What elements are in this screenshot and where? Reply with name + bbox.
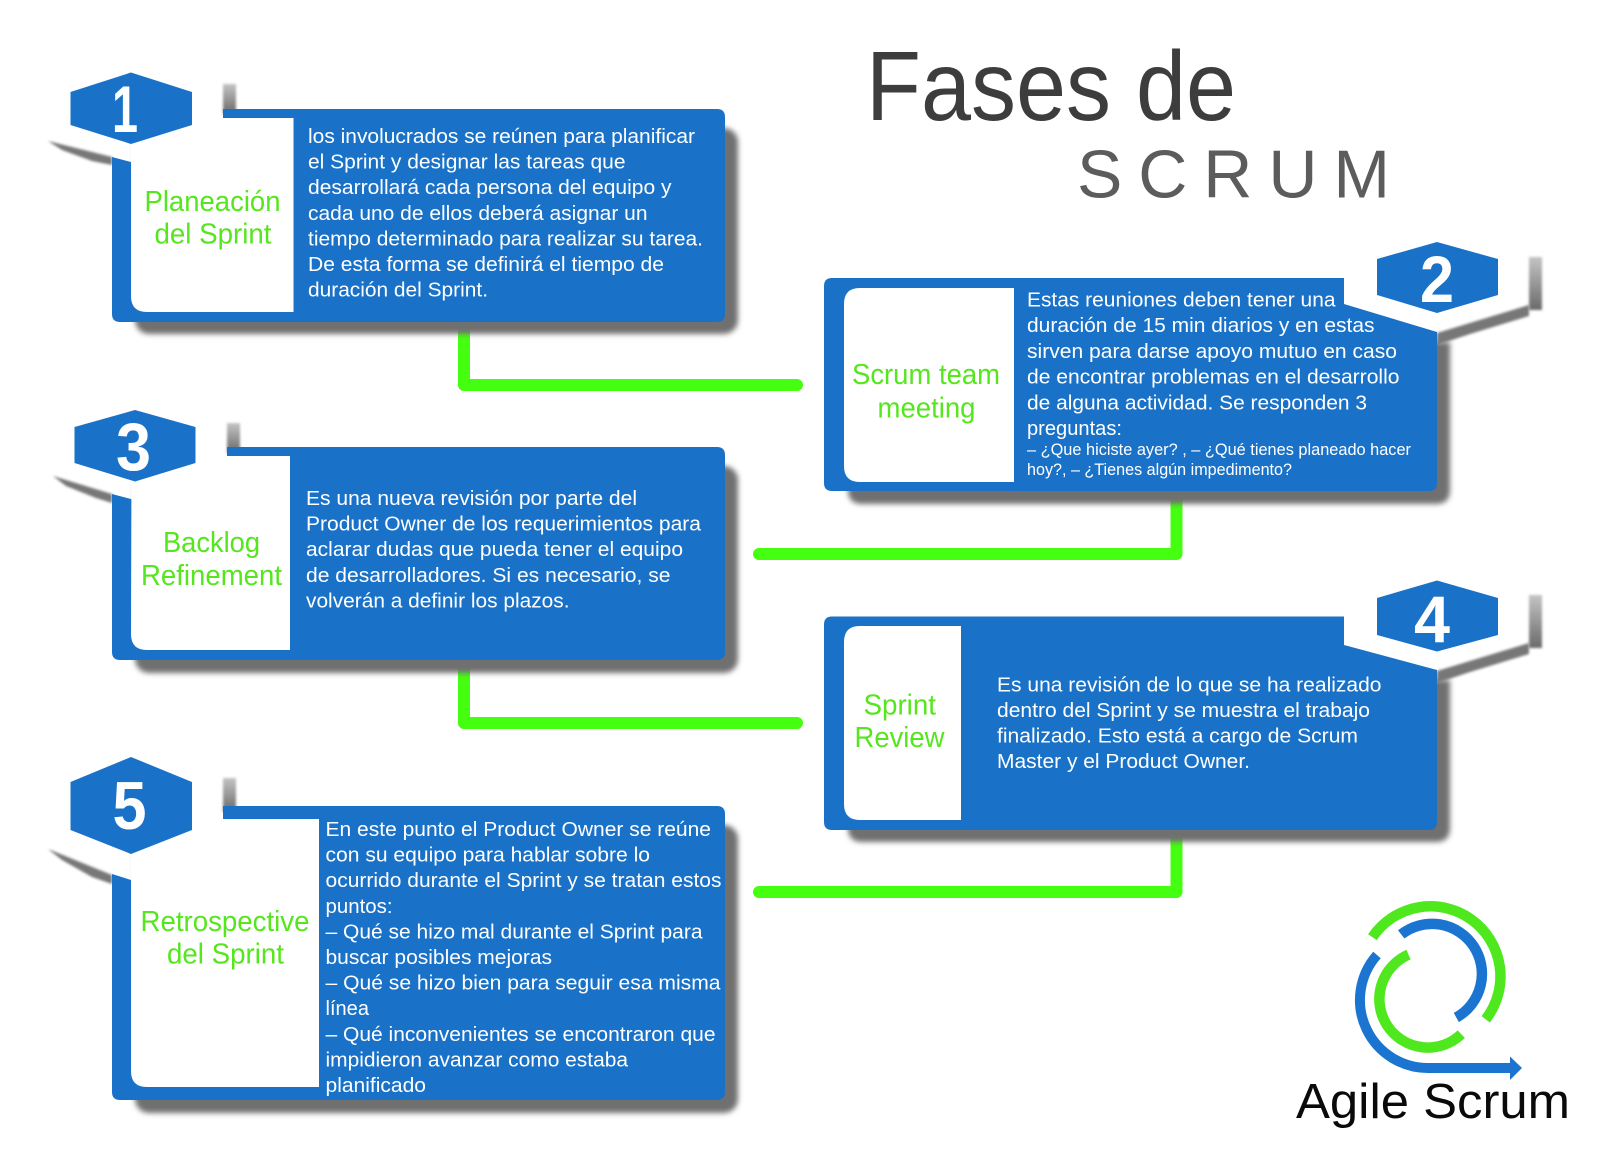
icon: hexagon number 2: 2 xyxy=(1420,242,1454,316)
text: phase 5 description: impidieron avanzar como estaba xyxy=(326,1048,629,1071)
icon: hexagon number 4 xyxy=(1377,580,1498,656)
text: phase 5 description: – Qué se hizo bien para seguir esa misma xyxy=(326,972,721,995)
icon: hexagon number 2 xyxy=(1377,242,1498,316)
title: Fases de SCRUM: SCRUM xyxy=(1077,136,1390,212)
heading: Scrum team meeting: Scrum team xyxy=(852,359,1000,391)
heading: Backlog Refinement: Refinement xyxy=(141,560,282,592)
panel: phase 5 Retrospective del Sprint xyxy=(48,757,738,1113)
text: phase 2 description: duración de 15 min diarios y en estas xyxy=(1027,314,1374,337)
text: phase 3 description: aclarar dudas que pueda tener el equipo xyxy=(306,538,683,561)
heading: Sprint Review: Sprint xyxy=(864,690,936,722)
heading: Retrospective del Sprint: del Sprint xyxy=(167,938,284,970)
text: phase 3 description: volverán a definir los plazos. xyxy=(306,589,570,612)
heading: Sprint Review: Review xyxy=(854,722,945,754)
text: phase 5 description: con su equipo para hablar sobre lo xyxy=(326,844,650,867)
title: Fases de SCRUM: Fases de xyxy=(866,31,1236,141)
icon: hexagon number 5: 5 xyxy=(112,768,146,844)
text: phase 4 description xyxy=(997,674,1382,773)
heading: Scrum team meeting xyxy=(852,359,1000,424)
text: phase 3 description: Es una nueva revisión por parte del xyxy=(306,487,637,510)
connector: phase 1 to phase 2 xyxy=(464,332,797,385)
text: phase 5 description: línea xyxy=(326,997,370,1020)
text: phase 5 description: En este punto el Product Owner se reúne xyxy=(326,818,711,841)
text: phase 5 description xyxy=(326,818,722,1097)
text: phase 3 description xyxy=(306,487,702,612)
text: phase 3 description: Product Owner de los requerimientos para xyxy=(306,513,702,536)
heading: Retrospective del Sprint: Retrospective xyxy=(140,906,310,938)
text: phase 1 description: duración del Sprint. xyxy=(308,279,488,302)
icon: hexagon number 4: 4 xyxy=(1414,582,1450,656)
text: phase 3 description: de desarrolladores. Si es necesario, se xyxy=(306,564,670,587)
icon: hexagon number 3: 3 xyxy=(116,409,151,485)
text: phase 1 description: De esta forma se definirá el tiempo de xyxy=(308,253,664,276)
text: phase 2 description: preguntas: xyxy=(1027,417,1122,440)
connector: phase 2 to phase 3 xyxy=(759,500,1176,554)
text: phase 1 description: tiempo determinado para realizar su tarea. xyxy=(308,227,703,250)
panel: phase 3 Backlog Refinement xyxy=(53,409,738,673)
text: phase 2 description: de encontrar problemas en el desarrollo xyxy=(1027,366,1400,389)
text: phase 2 description xyxy=(1027,288,1411,479)
text: phase 1 description: el Sprint y designar las tareas que xyxy=(308,151,626,174)
text: phase 1 description: cada uno de ellos deberá asignar un xyxy=(308,202,648,225)
connector: phase 4 to phase 5 xyxy=(759,838,1176,892)
heading: Planeación del Sprint xyxy=(144,186,280,250)
text: phase 1 description xyxy=(308,125,703,302)
title: Fases de SCRUM xyxy=(866,31,1390,212)
heading: Retrospective del Sprint xyxy=(140,906,310,970)
heading: Backlog Refinement xyxy=(141,527,282,592)
text: phase 5 description: buscar posibles mejoras xyxy=(326,946,552,969)
icon: hexagon number 1 xyxy=(70,72,192,146)
logo: Agile Scrum: Agile Scrum xyxy=(1296,1075,1570,1129)
heading: Planeación del Sprint: Planeación xyxy=(144,186,280,218)
text: phase 2 description: de alguna actividad. Se responden 3 xyxy=(1027,391,1367,414)
text: phase 4 description: finalizado. Esto está a cargo de Scrum xyxy=(997,724,1358,748)
logo: Agile Scrum xyxy=(1296,906,1570,1129)
icon: hexagon number 5 xyxy=(70,757,192,854)
text: phase 4 description: Es una revisión de lo que se ha realizado xyxy=(997,674,1382,696)
text: phase 2 description: hoy?, – ¿Tienes algún impedimento? xyxy=(1027,461,1292,479)
text: phase 5 description: – Qué inconvenientes se encontraron que xyxy=(326,1023,716,1046)
panel: phase 4 Sprint Review xyxy=(824,580,1542,842)
panel: phase 1 Planeación del Sprint xyxy=(48,72,738,334)
text: phase 1 description: desarrollará cada persona del equipo y xyxy=(308,176,672,199)
heading: Backlog Refinement: Backlog xyxy=(163,527,260,559)
text: phase 1 description: los involucrados se reúnen para planificar xyxy=(308,125,695,148)
connector: phase 3 to phase 4 xyxy=(464,670,797,723)
heading: Planeación del Sprint: del Sprint xyxy=(154,218,272,250)
text: phase 5 description: planificado xyxy=(326,1074,426,1097)
text: phase 2 description: Estas reuniones deben tener una xyxy=(1027,288,1336,311)
icon: hexagon number 3 xyxy=(74,409,196,485)
text: phase 5 description: – Qué se hizo mal durante el Sprint para xyxy=(326,920,703,943)
heading: Sprint Review xyxy=(854,690,945,754)
text: phase 2 description: sirven para darse apoyo mutuo en caso xyxy=(1027,340,1397,363)
icon: hexagon number 1: 1 xyxy=(112,72,138,146)
text: phase 5 description: puntos: xyxy=(326,895,392,918)
text: phase 4 description: Master y el Product Owner. xyxy=(997,750,1250,773)
heading: Scrum team meeting: meeting xyxy=(878,392,976,424)
text: phase 2 description: – ¿Que hiciste ayer? , – ¿Qué tienes planeado hacer xyxy=(1027,441,1411,459)
panel: phase 2 Scrum team meeting xyxy=(824,242,1542,504)
text: phase 5 description: ocurrido durante el Sprint y se tratan estos xyxy=(326,869,722,892)
text: phase 4 description: dentro del Sprint y se muestra el trabajo xyxy=(997,699,1370,722)
